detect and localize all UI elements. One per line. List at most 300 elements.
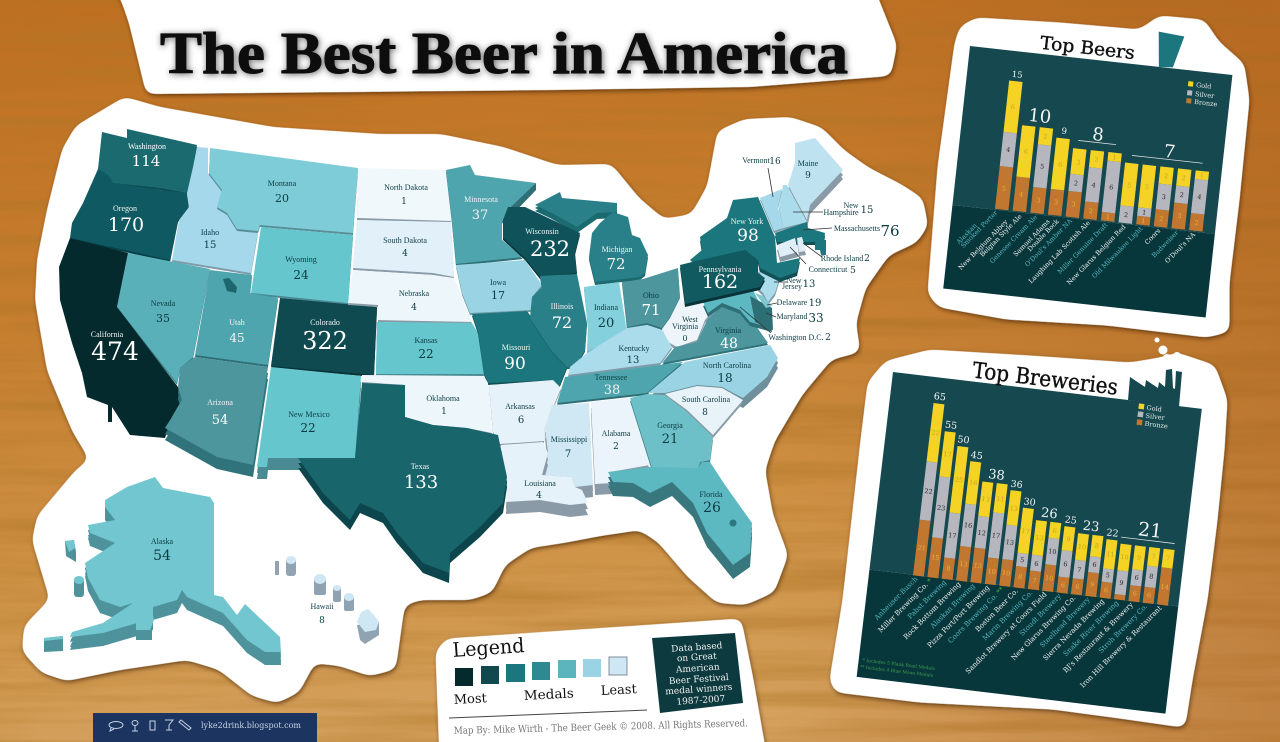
state: Kentucky (568, 325, 672, 377)
state: California (59, 238, 182, 438)
state: South Carolina: 8 (702, 408, 708, 418)
title: The Best Beer in America (160, 20, 848, 86)
bar totals: 22 (1106, 527, 1119, 540)
bars: 10 (1077, 543, 1087, 552)
bar totals: 65 (933, 391, 946, 403)
bars: 13 (1005, 538, 1014, 547)
label: Vermont: Vermont (742, 156, 771, 165)
state: Missouri: Missouri (502, 343, 531, 352)
state: Tennessee: 38 (604, 383, 620, 398)
bar totals (1004, 70, 1210, 166)
bars: 12 (977, 529, 986, 538)
label: Maryland: Maryland (776, 312, 808, 321)
state: Alaska: 54 (153, 548, 171, 564)
state: Maine (788, 138, 843, 229)
chart legend: Bronze (1194, 98, 1218, 108)
beer names: Miller Genuine Draft (1056, 221, 1110, 276)
state: Vermont (760, 189, 783, 233)
label: Rhode Island: 2 (864, 254, 870, 264)
label: Massachusetts: Massachusetts (834, 224, 880, 233)
state: Montana: 20 (275, 192, 289, 205)
bars: 2 (1194, 219, 1199, 227)
bars: 17 (948, 531, 957, 540)
state: Virginia: 48 (720, 336, 738, 352)
bar totals: 25 (1064, 514, 1077, 527)
brewery names: Rock Bottom Brewing (902, 580, 963, 641)
state: Virginia (662, 305, 768, 365)
brewery names: Sandlot Brewery at Coors Field (964, 590, 1049, 676)
state: Texas: Texas (411, 462, 429, 471)
state: Louisiana: Louisiana (524, 479, 556, 488)
bars: 9 (1136, 554, 1142, 562)
bars: 14 (1160, 583, 1169, 592)
bar totals: 26 (1040, 506, 1058, 522)
beer names: Genesee Cream Ale (988, 213, 1039, 265)
state: West Virginia: West (682, 315, 699, 324)
state: Nebraska: 4 (411, 303, 417, 313)
state: North Dakota (357, 168, 451, 223)
state: North Carolina: North Carolina (703, 361, 752, 370)
label: Maryland (776, 311, 824, 325)
state: Arkansas: Arkansas (505, 402, 535, 411)
state: New York: New York (731, 217, 763, 226)
state: Connecticut and Rhode Island (777, 237, 806, 262)
brewery names: Marin Brewing Co. (981, 589, 1034, 642)
bars: 2 (1159, 215, 1164, 223)
bar totals: 7 (1163, 141, 1176, 163)
state: South Dakota (353, 220, 454, 279)
bars: 5 (1105, 571, 1110, 580)
bars: 6 (1034, 560, 1039, 568)
data source note (652, 633, 743, 713)
bars: 2 (1181, 174, 1186, 182)
bars: 13 (1035, 534, 1044, 542)
state: Hawaii: 8 (319, 616, 325, 626)
bar totals (920, 391, 1189, 547)
footnotes: * Includes 5 Plank Road Medals (862, 657, 936, 672)
brewery names: Pabst Brewing (906, 578, 948, 621)
bars: 2 (1073, 179, 1078, 188)
state: Colorado: 322 (302, 327, 348, 355)
state: Idaho: 15 (204, 240, 216, 251)
state: Kansas: Kansas (414, 336, 438, 345)
state: Kansas: 22 (418, 347, 434, 361)
label: Delaware: 19 (809, 298, 821, 309)
state: Texas (298, 383, 507, 583)
beer names: O'Doul's Amber NA (1023, 217, 1074, 269)
state: New Mexico: 22 (300, 421, 316, 435)
footer icons (109, 720, 191, 731)
label: New Jersey: Jersey (782, 282, 802, 291)
bars: 10 (1002, 569, 1011, 578)
state: Pennsylvania (680, 250, 765, 307)
chart legend: Silver (1145, 412, 1166, 422)
state: Michigan (535, 192, 648, 285)
state: South Dakota: South Dakota (383, 236, 427, 245)
state: Wisconsin: 232 (530, 237, 570, 261)
bars: 4 (1197, 193, 1202, 201)
beer names: Coors (1143, 227, 1162, 246)
state: Tennessee: Tennessee (595, 373, 628, 382)
state: Kentucky: Kentucky (618, 344, 650, 353)
bars: 13 (1009, 504, 1018, 513)
bars: 3 (1071, 200, 1076, 209)
state: Minnesota (446, 165, 536, 266)
state: Pennsylvania: 162 (702, 271, 738, 293)
bars (913, 403, 1189, 606)
footnotes: ** Includes 4 Blue Moon Medals (859, 664, 934, 679)
state: Alaska: Alaska (151, 537, 174, 546)
state: Alaska (44, 477, 281, 665)
state: Idaho: Idaho (201, 228, 219, 237)
credit line: Map By: Mike Wirth - The Beer Geek © 2008. All Rights Reserved. (454, 718, 748, 737)
bars: 9 (1090, 580, 1095, 589)
panel: top breweries chart (857, 335, 1206, 714)
state: New Mexico (257, 367, 361, 479)
bars: 7 (1151, 552, 1156, 561)
legend scale labels: Least (600, 682, 638, 699)
brewery names: Sierra Nevada Brewing (1042, 597, 1106, 662)
bars: 6 (1075, 583, 1080, 591)
bars: 6 (1023, 148, 1028, 156)
label: Vermont: 16 (769, 157, 781, 167)
state: Alabama: Alabama (602, 429, 631, 438)
panel: top beers chart (943, 11, 1236, 317)
state: Idaho (172, 147, 258, 275)
label: Massachusetts: 76 (880, 222, 900, 240)
chart legend (1186, 80, 1220, 108)
label: Connecticut: Connecticut (809, 265, 848, 274)
state: Mississippi: Mississippi (551, 435, 588, 444)
state: Minnesota: Minnesota (464, 195, 498, 204)
state: Ohio: 71 (641, 301, 661, 319)
legend scale labels (453, 682, 638, 708)
state: Arizona: Arizona (207, 398, 233, 407)
state: California: California (91, 330, 124, 339)
label: Delaware (777, 298, 821, 309)
chart title: Top Beers (1039, 33, 1136, 64)
bars: 6 (1109, 183, 1114, 192)
state: Kentucky: 13 (627, 355, 639, 366)
panel: top breweries backing (832, 352, 1225, 725)
bars: 9 (1066, 535, 1071, 544)
data source note: on Great (677, 652, 717, 664)
state: West Virginia: 0 (682, 334, 688, 343)
label: Washington D.C.: Washington D.C. (768, 333, 824, 342)
state: Illinois (530, 274, 587, 369)
chart legend: Gold (1146, 404, 1162, 414)
brewery names (867, 570, 1164, 698)
footnotes (859, 657, 936, 679)
state: New Hampshire (779, 185, 807, 230)
state: Louisiana (501, 442, 588, 517)
label: New Jersey (782, 276, 815, 291)
state: Nevada: Nevada (151, 299, 176, 308)
data source note: American (675, 662, 720, 676)
brewery names: Pizza Port/Port Brewing (926, 583, 992, 650)
label: Maryland: 33 (808, 311, 824, 325)
label: New Hampshire: 15 (861, 205, 873, 216)
brewery names: Snake River Brewing (1062, 599, 1121, 658)
bars: 10 (987, 567, 996, 576)
label: Washington D.C.: 2 (825, 333, 831, 343)
bars: 3 (1054, 198, 1059, 207)
state: Tennessee (557, 362, 683, 405)
state: Montana: Montana (268, 179, 297, 188)
state: Maine: Maine (798, 159, 819, 168)
brewery names: Iron Hill Brewery & Restaurant (1079, 604, 1164, 690)
bars: 1 (1112, 153, 1117, 162)
bars: 2 (1179, 191, 1184, 199)
beer names: New Glarus Belgian Red (1065, 223, 1127, 287)
state: New Mexico: New Mexico (288, 410, 330, 419)
bars: 2 (1164, 172, 1169, 181)
icon: factory (1128, 369, 1182, 407)
brewery names: Anheuser-Busch (872, 575, 920, 623)
bars: 6 (1063, 560, 1068, 568)
beer names: Old Milwaukee Light (1090, 225, 1145, 280)
state: Wyoming (251, 227, 353, 305)
state: Missouri: 90 (504, 354, 526, 374)
bars: 13 (959, 560, 968, 569)
state: Colorado: Colorado (310, 318, 340, 327)
state: West Virginia: Virginia (672, 322, 698, 331)
bars: 7 (1077, 566, 1082, 574)
state: Maine: 9 (805, 171, 811, 181)
bars: 22 (924, 487, 933, 496)
panel: top beers backing (930, 18, 1247, 335)
state: Florida (608, 462, 752, 579)
state: West Virginia (662, 298, 720, 350)
state: Washington: Washington (128, 142, 166, 151)
bars: 13 (981, 495, 990, 504)
bars: 7 (1032, 576, 1037, 585)
bar totals: 55 (944, 420, 958, 432)
state: Utah: 45 (229, 331, 245, 345)
brewery names: Stoudt Brewery (1018, 592, 1063, 638)
bars: 10 (1048, 547, 1057, 556)
state: Washington (98, 129, 197, 195)
legend heading: Legend (452, 633, 525, 662)
state: South Carolina: South Carolina (682, 395, 731, 404)
bar totals: 8 (1091, 124, 1105, 146)
state: Kansas (376, 322, 484, 376)
bar totals: 23 (1082, 519, 1100, 535)
state: Washington: 114 (132, 152, 160, 170)
data source note: Data based (671, 641, 723, 655)
bars: 17 (991, 531, 1001, 540)
data source note: medal winners (665, 683, 733, 697)
state: Oregon (70, 169, 189, 262)
bars: 22 (931, 428, 940, 437)
brewery names: Alaskan Brewing (928, 582, 977, 631)
legend colour scale (455, 657, 627, 686)
state: North Carolina: 18 (717, 371, 733, 385)
state: Minnesota: 37 (472, 208, 488, 223)
bars: 8 (1094, 542, 1099, 550)
bars: 6 (1134, 574, 1139, 582)
beer names: O'Doul's NA (1163, 230, 1197, 265)
legend scale labels: Medals (523, 686, 574, 704)
state: Hawaii: Hawaii (310, 602, 334, 611)
state: Georgia (630, 394, 713, 471)
bar totals: 45 (970, 450, 983, 462)
state: Indiana: Indiana (594, 303, 618, 312)
bars: 17 (1021, 527, 1030, 536)
state: Mississippi (542, 403, 593, 499)
bars: 10 (1120, 553, 1129, 562)
state: Montana (209, 148, 358, 235)
bars: 5 (1127, 181, 1132, 190)
state: Maryland (703, 290, 773, 332)
bars: 6 (1010, 103, 1015, 111)
brewery names: Coors Brewing Co. ** (946, 585, 1006, 645)
data source note: 1987-2007 (676, 694, 726, 708)
state: Massachusetts (775, 222, 826, 255)
bars: 8 (946, 564, 951, 573)
state: Hawaii (275, 556, 379, 644)
bars: 3 (1177, 212, 1182, 220)
bars: 2 (1043, 133, 1048, 141)
bars: 6 (1092, 560, 1097, 569)
state: South Carolina (665, 386, 743, 438)
bars: 1 (1199, 171, 1204, 179)
bars: 7 (1166, 554, 1171, 563)
bars: 4 (1006, 146, 1011, 154)
bars: 5 (1020, 556, 1025, 564)
state: New Jersey (757, 261, 779, 305)
panel: title banner (110, 0, 896, 93)
state: Wisconsin (503, 207, 580, 279)
state: North Dakota: North Dakota (384, 183, 428, 192)
label: Connecticut: 5 (850, 266, 856, 276)
state: New York (690, 197, 800, 282)
bars: 3 (1076, 158, 1081, 167)
beer names: Double Bock (1026, 218, 1061, 253)
bars: 6 (1147, 591, 1152, 600)
state: Iowa: 17 (491, 289, 505, 302)
state: Oregon: Oregon (113, 204, 137, 213)
bars: 11 (996, 495, 1005, 504)
state: Indiana (584, 282, 627, 354)
state: California: 474 (91, 337, 139, 366)
bars: 6 (1104, 586, 1109, 594)
bar totals: 38 (987, 467, 1006, 484)
bars: 5 (1040, 162, 1045, 171)
label: Connecticut (809, 265, 856, 276)
icon: beer glass (1155, 32, 1185, 69)
brewery names: BJ's Restaurant & Brewery (1062, 601, 1135, 674)
bars: 5 (1144, 183, 1149, 191)
bars: 3 (1161, 193, 1166, 201)
label: New Hampshire: New (843, 201, 859, 210)
bar totals: 30 (1023, 496, 1036, 509)
chart legend: Bronze (1144, 420, 1168, 430)
beer names: Samuel Adams (1012, 218, 1052, 258)
state: Missouri (472, 311, 567, 389)
label: New Jersey: 13 (803, 279, 815, 290)
beer names: Smoked Porter (959, 208, 1000, 250)
state: Iowa: Iowa (490, 278, 506, 287)
state: Ohio: Ohio (643, 291, 659, 300)
state: Oklahoma: 1 (441, 407, 447, 417)
state: Georgia: 21 (662, 432, 678, 447)
brewery names: Boston Beer Co. (974, 587, 1020, 634)
state: Wyoming: 24 (293, 268, 309, 282)
state: Wisconsin: Wisconsin (525, 227, 559, 236)
bars: 8 (1018, 573, 1023, 581)
bars: 1 (1141, 217, 1146, 225)
footer bar (93, 713, 317, 742)
state: Virginia: Virginia (715, 326, 741, 335)
state: Pennsylvania: Pennsylvania (699, 265, 742, 274)
bars: 2 (1094, 155, 1099, 164)
bars: 9 (1119, 579, 1124, 587)
bar totals: 36 (1010, 479, 1023, 491)
state: Illinois: 72 (552, 313, 572, 332)
bars: 8 (1149, 572, 1154, 581)
footer url: lyke2drink.blogspot.com (201, 721, 301, 731)
chart legend: Silver (1195, 90, 1216, 100)
state: Mississippi: 7 (565, 449, 571, 460)
state: Colorado (271, 298, 377, 377)
bars: 1 (1142, 208, 1147, 217)
map: contiguous states (59, 129, 843, 583)
beer names: New Belgium Abbey (957, 218, 1010, 272)
bars: 3 (1036, 196, 1041, 205)
state: Texas: 133 (404, 472, 438, 493)
callouts: small eastern states (740, 168, 832, 333)
bars: 21 (917, 544, 926, 553)
data source note: Beer Festival (669, 673, 729, 687)
state: Nebraska: Nebraska (399, 289, 430, 298)
state: Nevada (117, 253, 210, 385)
state: Utah: Utah (229, 318, 245, 327)
state: North Dakota: 1 (401, 197, 407, 207)
bars: 2 (1088, 207, 1093, 215)
state: Illinois: Illinois (551, 302, 573, 311)
state: Michigan: 72 (606, 255, 626, 273)
state: South Dakota: 4 (402, 249, 408, 259)
label: Massachusetts (834, 222, 900, 240)
beer names (950, 204, 1198, 303)
chart title: Top Breweries (971, 359, 1119, 401)
bars: 6 (1132, 589, 1137, 598)
bar totals: 15 (1011, 70, 1023, 81)
state: Alabama: 2 (613, 442, 619, 452)
state: Arkansas: 6 (518, 415, 524, 426)
bars: 6 (1052, 527, 1057, 535)
beer names: Alaskan (954, 222, 979, 247)
state: Arizona: 54 (212, 413, 228, 428)
bars: 16 (964, 521, 973, 530)
state: Nebraska (348, 270, 472, 324)
state: Utah (195, 270, 278, 367)
bar totals: 9 (1061, 127, 1067, 137)
bars: 1 (1105, 213, 1110, 221)
label: Delaware: Delaware (777, 298, 808, 307)
state: Arizona (165, 357, 268, 477)
beer names: Belgian Style Ale (978, 212, 1024, 259)
beer names: Budweiser (1150, 228, 1181, 259)
bars: 2 (1124, 211, 1129, 219)
bars: 13 (973, 561, 982, 570)
bars: 5 (1001, 184, 1006, 193)
label: Rhode Island: Rhode Island (821, 254, 863, 263)
bars (995, 81, 1217, 232)
bars: 11 (1106, 550, 1115, 559)
bars: 6 (1060, 581, 1065, 589)
